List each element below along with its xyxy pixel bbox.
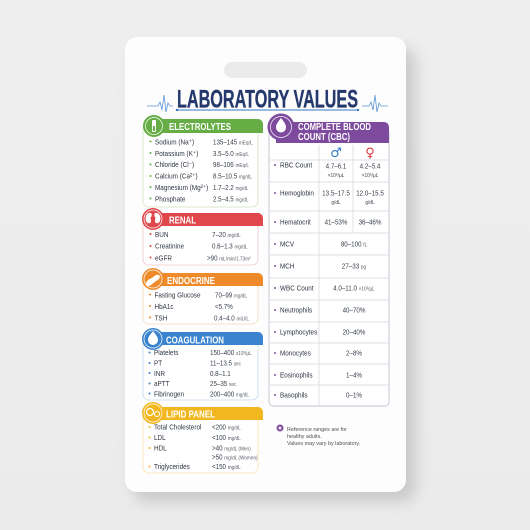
panel: endocrine: 70–99 mg/dL <box>215 292 247 300</box>
panel: complete blood count: Basophils <box>280 392 308 400</box>
panel: complete blood count: 12.0–15.5 <box>356 190 384 198</box>
panel: complete blood count: 36–46% <box>359 219 381 227</box>
panel: complete blood count: Monocytes <box>280 350 311 358</box>
panel: coagulation: Platelets <box>154 350 179 357</box>
panel: lipid panel: <200 mg/dL <box>212 424 241 432</box>
panel: renal: 7–20 mg/dL <box>212 232 241 239</box>
panel: renal: RENAL <box>169 216 196 226</box>
icon: male symbol: ♂ <box>330 146 342 161</box>
panel: lipid panel: LDL <box>154 435 166 442</box>
panel: renal: Creatinine <box>155 243 184 251</box>
panel: electrolytes: 8.5–10.5 mg/dL <box>213 173 252 181</box>
panel: endocrine: HbA1c <box>154 304 174 311</box>
panel: lipid panel <box>142 402 263 473</box>
panel: complete blood count: ×10⁶/μL <box>362 173 378 179</box>
panel: complete blood count: 80–100 fL <box>341 241 367 249</box>
panel: complete blood count: COUNT (CBC) <box>298 132 350 143</box>
panel: complete blood count: Hemoglobin <box>280 190 314 198</box>
panel: electrolytes: 135–145 mEq/L <box>213 139 253 147</box>
panel: complete blood count: Lymphocytes <box>280 329 318 337</box>
panel: electrolytes: 2.5–4.5 mg/dL <box>213 196 249 204</box>
panel: complete blood count: 4.0–11.0 ×10³/μL <box>333 285 375 293</box>
panel: complete blood count: 4.2–5.4 <box>360 163 381 171</box>
panel: coagulation: INR <box>154 371 165 378</box>
panel: endocrine: 0.4–4.0 mIU/L <box>214 315 249 323</box>
panel: complete blood count: 4.7–6.1 <box>326 163 347 171</box>
panel: complete blood count: 2–8% <box>346 350 362 358</box>
panel: endocrine: TSH <box>154 315 167 323</box>
panel: electrolytes: Sodium (Na⁺) <box>155 139 194 147</box>
panel: renal: 0.6–1.3 mg/dL <box>212 243 248 251</box>
panel: electrolytes: Potassium (K⁺) <box>155 151 198 158</box>
panel: complete blood count: 1–4% <box>346 372 362 380</box>
panel: complete blood count: g/dL <box>365 200 375 206</box>
panel: complete blood count: 40–70% <box>343 307 365 315</box>
panel: coagulation <box>142 328 263 400</box>
footnote: healthy adults. <box>287 434 322 440</box>
panel: complete blood count: 41–53% <box>325 219 347 227</box>
panel: lipid panel: LIPID PANEL <box>166 410 215 420</box>
title <box>147 86 388 114</box>
panel: complete blood count: MCV <box>280 241 294 249</box>
panel: lipid panel: >40 mg/dL (Men) <box>212 445 251 453</box>
lanyard slot <box>224 62 307 78</box>
panel: coagulation: Fibrinogen <box>154 391 184 399</box>
panel: coagulation: 11–13.5 sec <box>210 360 241 368</box>
panel: electrolytes: 1.7–2.2 mg/dL <box>213 185 249 192</box>
panel: complete blood count: 13.5–17.5 <box>322 190 350 198</box>
panel: electrolytes: Chloride (Cl⁻) <box>155 162 194 169</box>
panel: lipid panel: HDL <box>154 445 167 453</box>
panel: complete blood count: MCH <box>280 263 295 271</box>
footnote: Values may vary by laboratory. <box>287 441 360 447</box>
panel: coagulation: 150–400 x10³/μL <box>210 350 252 357</box>
panel: complete blood count: RBC Count <box>280 162 312 170</box>
panel: electrolytes: Phosphate <box>155 196 186 204</box>
panel: electrolytes: Magnesium (Mg²⁺) <box>155 185 208 192</box>
panel: complete blood count: g/dL <box>331 200 341 206</box>
panel: complete blood count: ×10⁶/μL <box>328 173 344 179</box>
panel: complete blood count: 20–40% <box>343 329 365 337</box>
panel: complete blood count: 27–33 pg <box>342 263 366 271</box>
panel: renal: eGFR <box>155 255 172 263</box>
panel: coagulation: PT <box>154 360 163 368</box>
footnote: ★ <box>277 425 283 432</box>
panel: coagulation: aPTT <box>154 381 170 388</box>
panel: endocrine: <5.7% <box>215 304 233 311</box>
panel: lipid panel: >50 mg/dL (Women) <box>212 454 258 462</box>
panel: renal <box>142 208 263 265</box>
panel: coagulation: 25–35 sec <box>210 381 237 388</box>
panel: endocrine: Fasting Glucose <box>154 292 201 300</box>
footnote: Reference ranges are for <box>287 427 347 433</box>
panel: lipid panel: <100 mg/dL <box>212 435 241 442</box>
panel: complete blood count: Eosinophils <box>280 372 313 380</box>
footnote <box>276 424 360 447</box>
panel: lipid panel: Total Cholesterol <box>154 424 202 432</box>
panel: renal: >90 mL/min/1.73m² <box>207 255 251 263</box>
panel: electrolytes: Calcium (Ca²⁺) <box>155 173 198 181</box>
icon: female symbol: ♀ <box>365 146 375 161</box>
panel: endocrine: ENDOCRINE <box>167 276 215 287</box>
panel: electrolytes: ELECTROLYTES <box>169 122 231 133</box>
panel: lipid panel: Triglycerides <box>154 464 190 471</box>
panel: lipid panel: <150 mg/dL <box>212 464 241 471</box>
card <box>125 37 406 492</box>
panel: complete blood count: WBC Count <box>280 285 314 293</box>
panel: electrolytes: 98–106 mEq/L <box>213 162 249 169</box>
panel: complete blood count: Neutrophils <box>280 307 313 315</box>
panel: electrolytes <box>143 115 263 207</box>
title: LABORATORY VALUES <box>177 86 358 114</box>
panel: renal: BUN <box>155 232 168 239</box>
panel: complete blood count: Hematocrit <box>280 219 311 227</box>
panel: complete blood count: COMPLETE BLOOD <box>298 122 371 133</box>
panel: electrolytes: 3.5–5.0 mEq/L <box>213 151 249 158</box>
panel: complete blood count <box>268 114 389 406</box>
panel: endocrine <box>142 268 263 324</box>
panel: coagulation: 0.8–1.1 <box>210 371 231 378</box>
panel: complete blood count: 0–1% <box>346 392 362 400</box>
panel: coagulation: 200–400 mg/dL <box>210 391 249 399</box>
panel: coagulation: COAGULATION <box>166 336 224 346</box>
